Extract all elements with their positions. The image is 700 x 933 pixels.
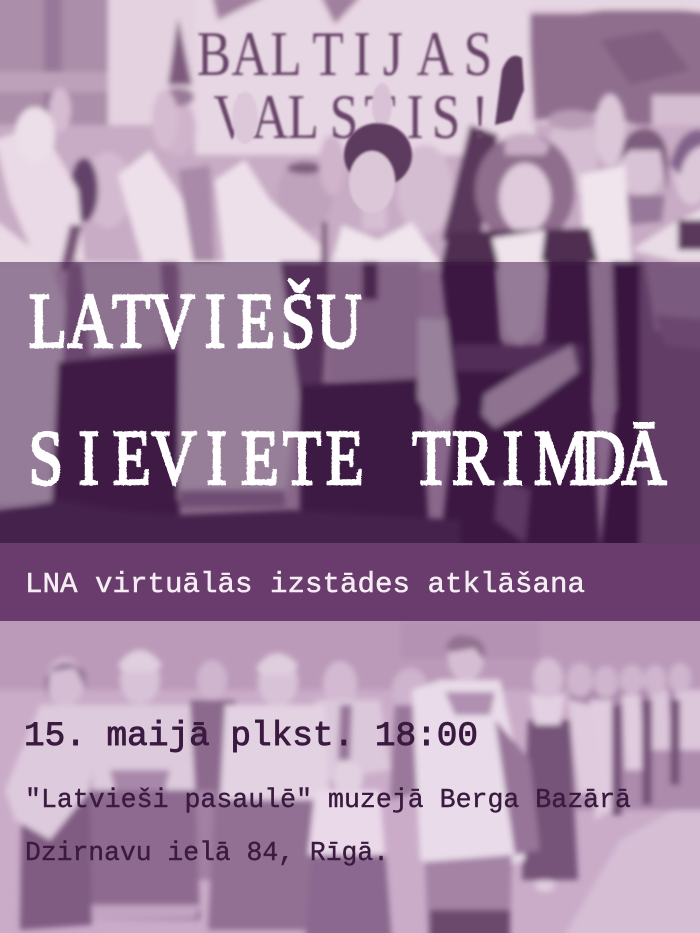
woman in dark dress (522, 720, 578, 880)
crowd backdrop (0, 125, 700, 265)
raised sleeves left (0, 125, 85, 270)
dark lower floor (0, 500, 458, 543)
venue line: "Latvieši pasaulē" muzejā Berga Bazārā (25, 785, 631, 815)
woman with tall crown (208, 790, 330, 930)
subtitle: LNA virtuālās izstādes atklāšana (25, 568, 585, 601)
dark arm (442, 125, 498, 240)
right striped panel (590, 262, 618, 410)
panel: top protest photograph (0, 0, 700, 555)
woman with crown (85, 780, 200, 920)
left robed figure body (0, 272, 68, 510)
white sleeve (418, 318, 458, 425)
child (305, 850, 392, 933)
title: SIEVIETE TRIMDĀ (29, 416, 667, 502)
sky (525, 0, 700, 10)
event date and time: 15. maijā plkst. 18:00 (24, 717, 478, 756)
road (566, 808, 700, 933)
foreground figures over banner lettering (232, 56, 524, 213)
left background buildings (0, 0, 112, 125)
plaid dress (640, 262, 700, 550)
central vest (328, 262, 420, 380)
woman in dark vest (190, 700, 240, 790)
title: LATVIEŠU (29, 279, 362, 365)
central woman collar (362, 205, 387, 230)
right woman costume (440, 262, 600, 550)
left dark strap (60, 225, 82, 270)
woman at left (20, 780, 92, 930)
background faces (175, 102, 197, 151)
left banner (108, 0, 198, 130)
right background trees (528, 4, 700, 130)
title (29, 279, 667, 502)
background wall (0, 621, 700, 690)
subtitle band (0, 543, 700, 621)
banner lettering in the photograph: BALTIJAS (197, 18, 492, 89)
address line: Dzirnavu ielā 84, Rīgā. (25, 838, 389, 868)
raised hands (49, 88, 71, 132)
large woman in white (412, 680, 525, 878)
right woman with blonde hair (475, 134, 575, 246)
banner lettering in the photograph (197, 32, 490, 140)
mid figures (391, 667, 428, 704)
left dress (61, 258, 180, 366)
banner lettering in the photograph: VALSTIS! (214, 81, 489, 152)
main banner (196, 0, 534, 128)
dark translucent title panel (0, 262, 700, 543)
white dress (178, 262, 300, 500)
right edge figure (632, 207, 700, 264)
panel: bottom procession photograph (0, 611, 700, 933)
far procession (570, 690, 700, 810)
